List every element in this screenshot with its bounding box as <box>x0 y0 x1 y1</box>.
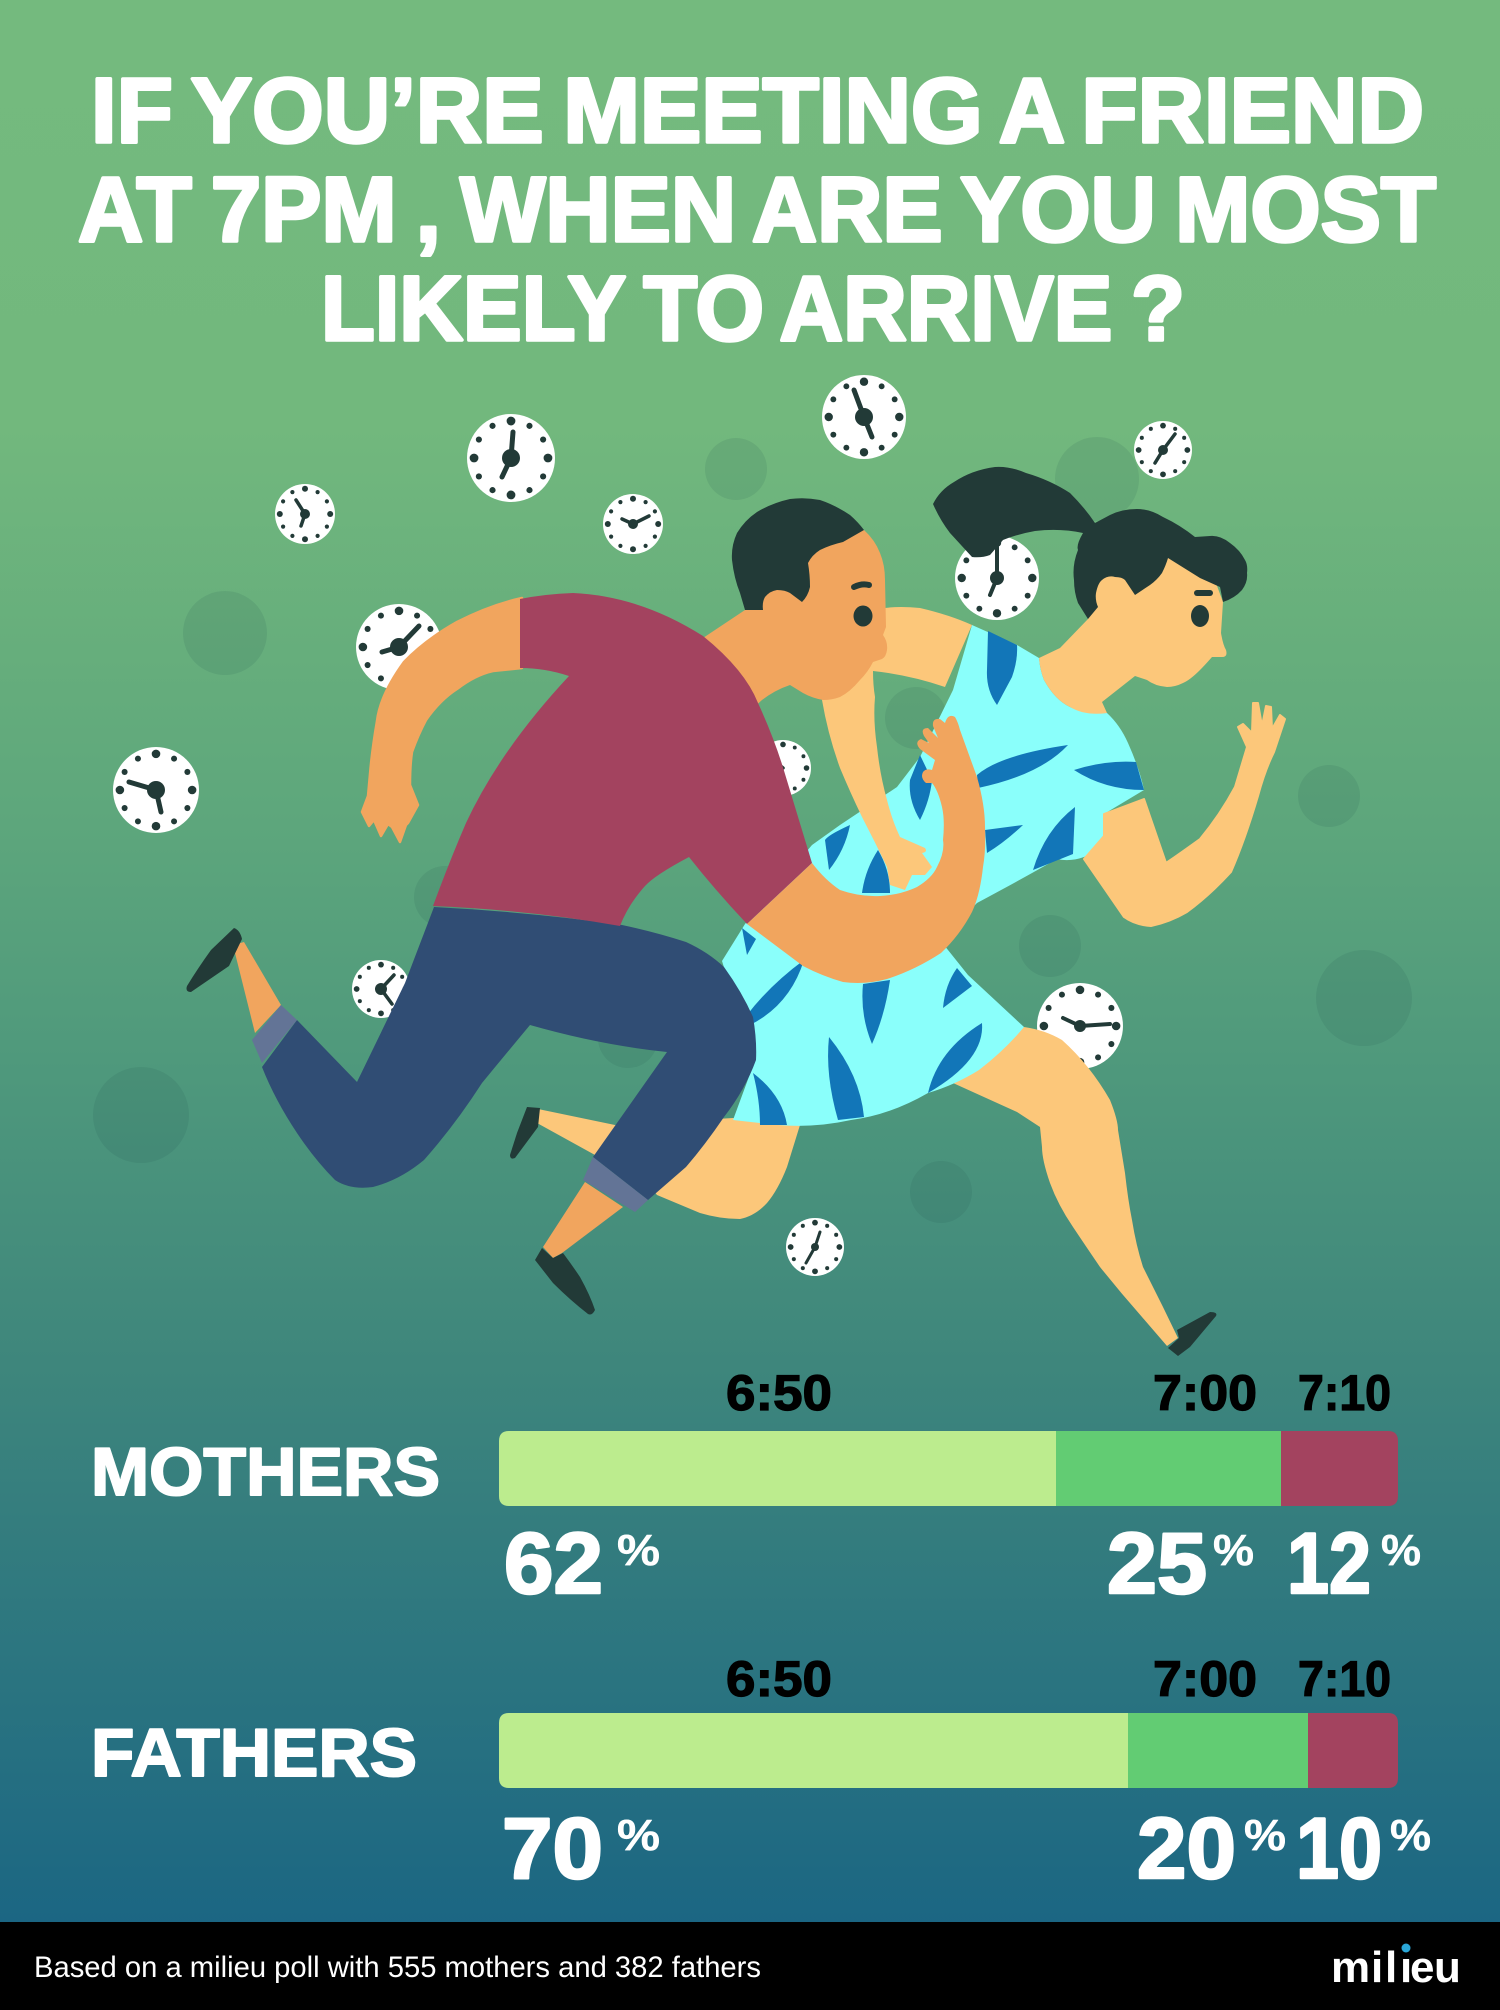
percentages fathers: 20 <box>1137 1801 1236 1897</box>
man back leg calf and shoe <box>186 928 281 1033</box>
percentages mothers: 62 <box>504 1516 603 1612</box>
clock 12 <box>786 1218 844 1276</box>
time labels fathers <box>726 1651 1391 1707</box>
background dots <box>93 437 1412 1223</box>
floating clocks <box>113 375 1192 1276</box>
percentages mothers: 12 <box>1287 1516 1371 1612</box>
trouser cuff right <box>583 1157 648 1212</box>
man eye <box>854 584 872 626</box>
title: IF YOU’RE MEETING A FRIEND <box>91 60 1424 162</box>
title <box>78 60 1436 360</box>
man trousers <box>262 907 756 1200</box>
percentages fathers: % <box>1244 1811 1286 1860</box>
label fathers: FATHERS <box>91 1715 417 1791</box>
woman running <box>510 467 1285 1356</box>
woman hair <box>933 467 1247 619</box>
man front arm <box>747 716 985 983</box>
clock 4 <box>356 604 442 690</box>
percentages fathers: % <box>617 1811 660 1860</box>
percentages mothers: % <box>1381 1526 1421 1575</box>
woman front leg and shoe <box>953 1027 1216 1356</box>
clock 7 <box>822 375 906 459</box>
percentages fathers: 70 <box>502 1801 603 1897</box>
clock 11 <box>1037 983 1123 1069</box>
clock 3 <box>603 494 663 554</box>
trouser cuff left <box>252 1005 297 1063</box>
percentages mothers: 25 <box>1107 1516 1207 1612</box>
man front calf and shoe <box>535 1182 623 1314</box>
dress leaves <box>742 631 1144 1125</box>
percentages fathers: % <box>1390 1811 1431 1860</box>
man running <box>186 498 985 1314</box>
woman back leg <box>510 1107 800 1219</box>
woman eye <box>1191 593 1210 627</box>
percentages mothers <box>504 1516 1421 1612</box>
clock 10 <box>755 740 811 796</box>
woman head and neck <box>1039 540 1226 714</box>
man shirt <box>433 593 812 926</box>
man back arm <box>362 598 522 842</box>
clock 9 <box>955 536 1039 620</box>
stacked bar mothers <box>499 1431 1398 1506</box>
clock 2 <box>275 484 335 544</box>
woman front arm <box>1084 703 1285 926</box>
time labels mothers <box>726 1365 1391 1421</box>
footer <box>0 1922 1500 2010</box>
clock 6 <box>352 960 410 1018</box>
time labels fathers: 6:50 <box>726 1651 832 1707</box>
percentages mothers: % <box>617 1526 660 1575</box>
title: AT 7PM , WHEN ARE YOU MOST <box>78 159 1436 261</box>
woman back arm <box>822 607 972 890</box>
clock 8 <box>1134 421 1192 479</box>
man hair <box>732 498 864 610</box>
source note: Based on a milieu poll with 555 mothers and 382 fathers <box>34 1951 761 1984</box>
man head and neck <box>700 530 887 720</box>
time labels mothers: 7:10 <box>1298 1365 1391 1421</box>
clock 1 <box>467 414 555 502</box>
time labels mothers: 6:50 <box>726 1365 832 1421</box>
title: LIKELY TO ARRIVE ? <box>321 258 1185 360</box>
time labels fathers: 7:10 <box>1298 1651 1391 1707</box>
dress <box>722 625 1144 1126</box>
percentages fathers: 10 <box>1296 1801 1382 1897</box>
milieu logo: milieu <box>1331 1943 1461 1992</box>
label mothers: MOTHERS <box>91 1434 440 1510</box>
percentages mothers: % <box>1213 1526 1254 1575</box>
time labels fathers: 7:00 <box>1153 1651 1257 1707</box>
time labels mothers: 7:00 <box>1153 1365 1257 1421</box>
percentages fathers <box>502 1801 1431 1897</box>
clock 5 <box>113 747 199 833</box>
stacked bar fathers <box>499 1713 1398 1788</box>
